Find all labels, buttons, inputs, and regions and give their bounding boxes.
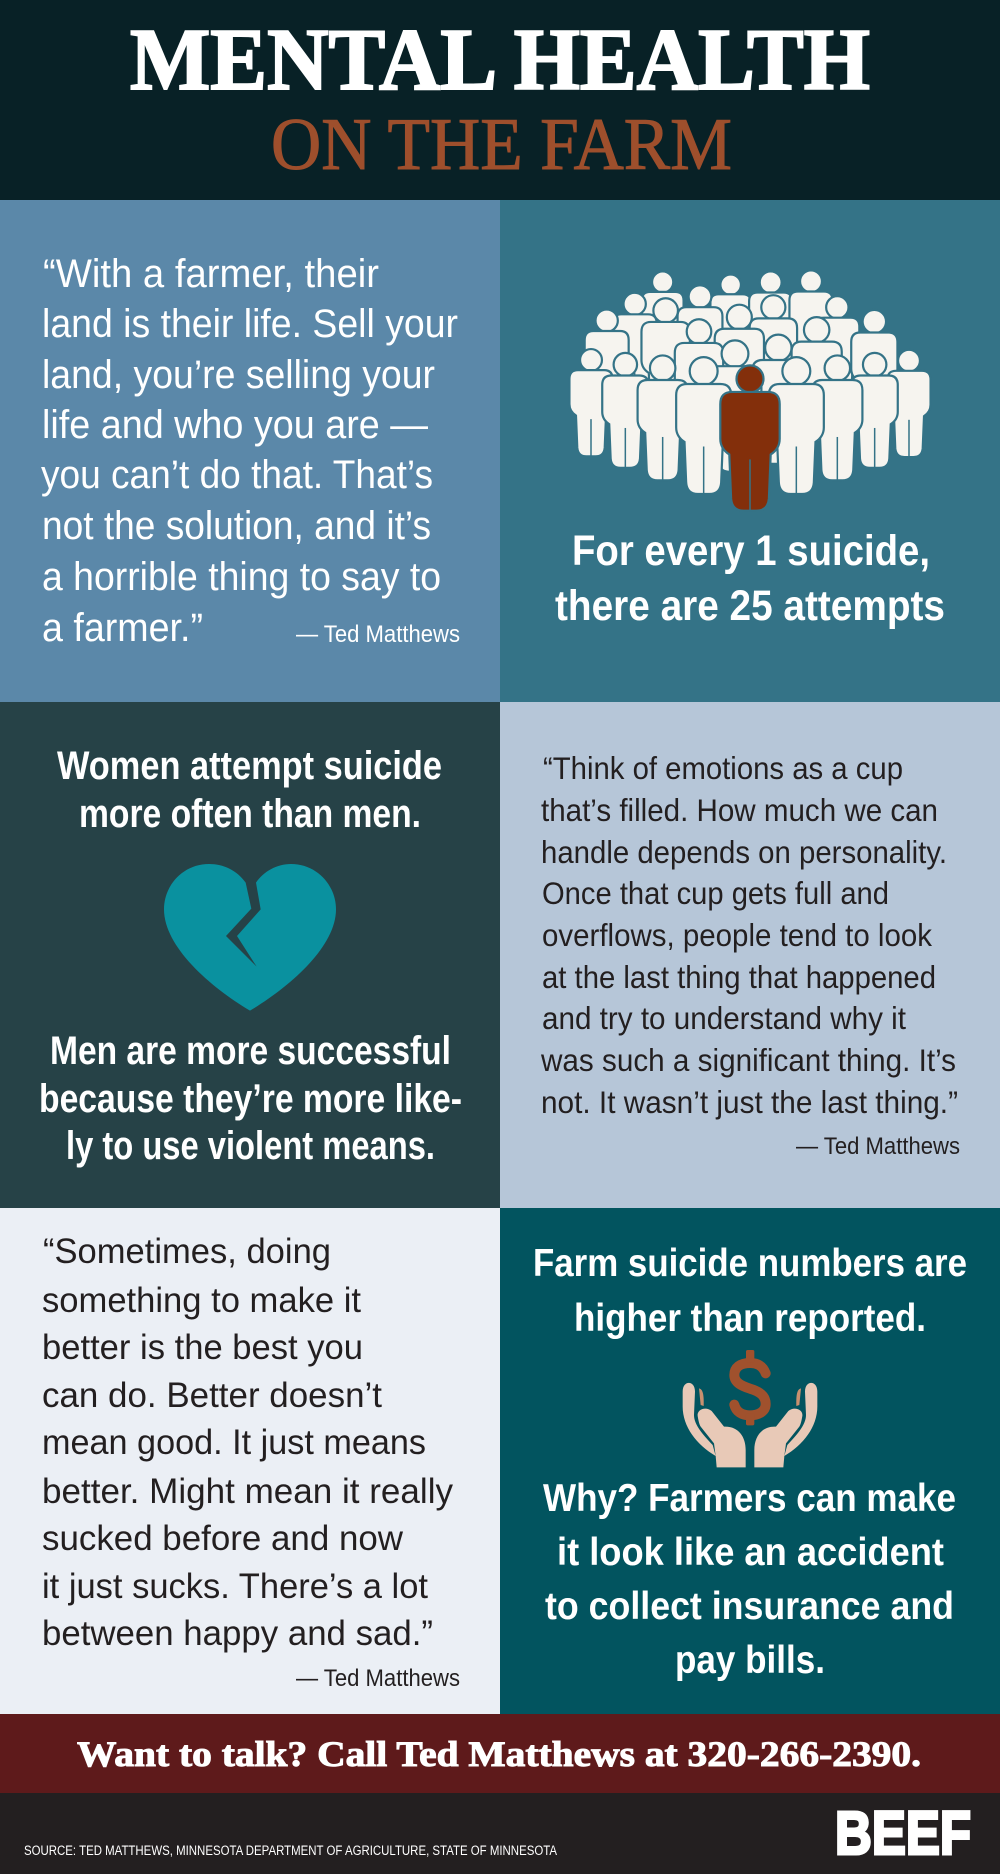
icon: broken heart — [164, 864, 336, 1011]
quote text: “Sometimes, doing — [43, 1231, 331, 1271]
quote text — [540, 750, 958, 1120]
quote text: between happy and sad.” — [42, 1613, 433, 1653]
attribution: — Ted Matthews — [296, 621, 460, 648]
heading: women attempt — [57, 744, 442, 836]
text: why numbers are higher: pay bills. — [675, 1639, 825, 1682]
quote text: land is their life. Sell your — [42, 302, 458, 346]
panel: underreported numbers — [500, 1208, 1000, 1714]
quote text: can do. Better doesn’t — [42, 1375, 382, 1415]
text: men more successful: Men are more successful — [50, 1029, 451, 1073]
panel: better quote — [0, 1208, 500, 1714]
text: men more successful: ly to use violent means. — [66, 1124, 435, 1168]
quote text: life and who you are — — [42, 403, 428, 447]
statistic text: For every 1 suicide, — [572, 527, 930, 575]
call to action text: Want to talk? Call Ted Matthews at 320-266-2390. — [77, 1734, 921, 1774]
subtitle: ON THE FARM — [271, 104, 732, 186]
source line: SOURCE: TED MATTHEWS, MINNESOTA DEPARTMENT OF AGRICULTURE, STATE OF MINNESOTA — [24, 1843, 557, 1858]
quote text: Once that cup gets full and — [542, 875, 889, 911]
heading: women attempt: Women attempt suicide — [57, 744, 442, 788]
quote text: was such a significant thing. It’s — [540, 1042, 956, 1078]
quote text — [42, 1231, 453, 1653]
call to action banner — [0, 1714, 1000, 1793]
attribution: — Ted Matthews — [296, 1665, 460, 1692]
quote text: “With a farmer, their — [43, 252, 379, 296]
quote text: something to make it — [42, 1280, 361, 1320]
text: why numbers are higher: it look like an accident — [557, 1531, 944, 1574]
heading: numbers higher than reported: higher than reported. — [574, 1297, 926, 1340]
icon: hands holding dollar sign — [683, 1350, 817, 1467]
quote text: a farmer.” — [42, 606, 203, 650]
quote text — [41, 252, 458, 650]
text: why numbers are higher: Why? Farmers can make — [543, 1477, 956, 1520]
text: men more successful — [39, 1029, 462, 1168]
attribution: — Ted Matthews — [796, 1133, 960, 1160]
text: men more successful: because they’re more like- — [39, 1077, 462, 1121]
quote text: not the solution, and it’s — [42, 504, 431, 548]
footer — [0, 1793, 1000, 1874]
panel: cup quote — [500, 702, 1000, 1208]
quote text: not. It wasn’t just the last thing.” — [541, 1084, 958, 1120]
text: why numbers are higher — [543, 1477, 956, 1682]
quote text: at the last thing that happened — [542, 959, 936, 995]
text: why numbers are higher: to collect insurance and — [545, 1585, 954, 1628]
quote text: sucked before and now — [42, 1518, 403, 1558]
quote text: you can’t do that. That’s — [41, 453, 433, 497]
heading: women attempt: more often than men. — [79, 792, 421, 836]
panel: land quote — [0, 200, 500, 702]
panel: women and men statistic — [0, 702, 500, 1208]
quote text: and try to understand why it — [542, 1000, 906, 1036]
quote text: a horrible thing to say to — [42, 555, 441, 599]
title: MENTAL HEALTH — [130, 12, 870, 109]
quote text: mean good. It just means — [42, 1422, 426, 1462]
quote text: better. Might mean it really — [42, 1471, 453, 1511]
logo: BEEF: BEEF — [835, 1799, 971, 1867]
heading: numbers higher than reported — [533, 1242, 967, 1340]
quote text: handle depends on personality. — [541, 834, 947, 870]
icon: crowd with one highlighted person — [569, 270, 931, 511]
statistic text: there are 25 attempts — [555, 582, 945, 630]
statistic text — [555, 527, 945, 630]
quote text: overflows, people tend to look — [542, 917, 932, 953]
quote text: land, you’re selling your — [42, 353, 435, 397]
quote text: it just sucks. There’s a lot — [42, 1566, 428, 1606]
quote text: “Think of emotions as a cup — [543, 750, 903, 786]
quote text: that’s filled. How much we can — [541, 792, 938, 828]
panel: attempts statistic — [500, 200, 1000, 702]
header panel — [0, 0, 1000, 200]
quote text: better is the best you — [42, 1327, 363, 1367]
